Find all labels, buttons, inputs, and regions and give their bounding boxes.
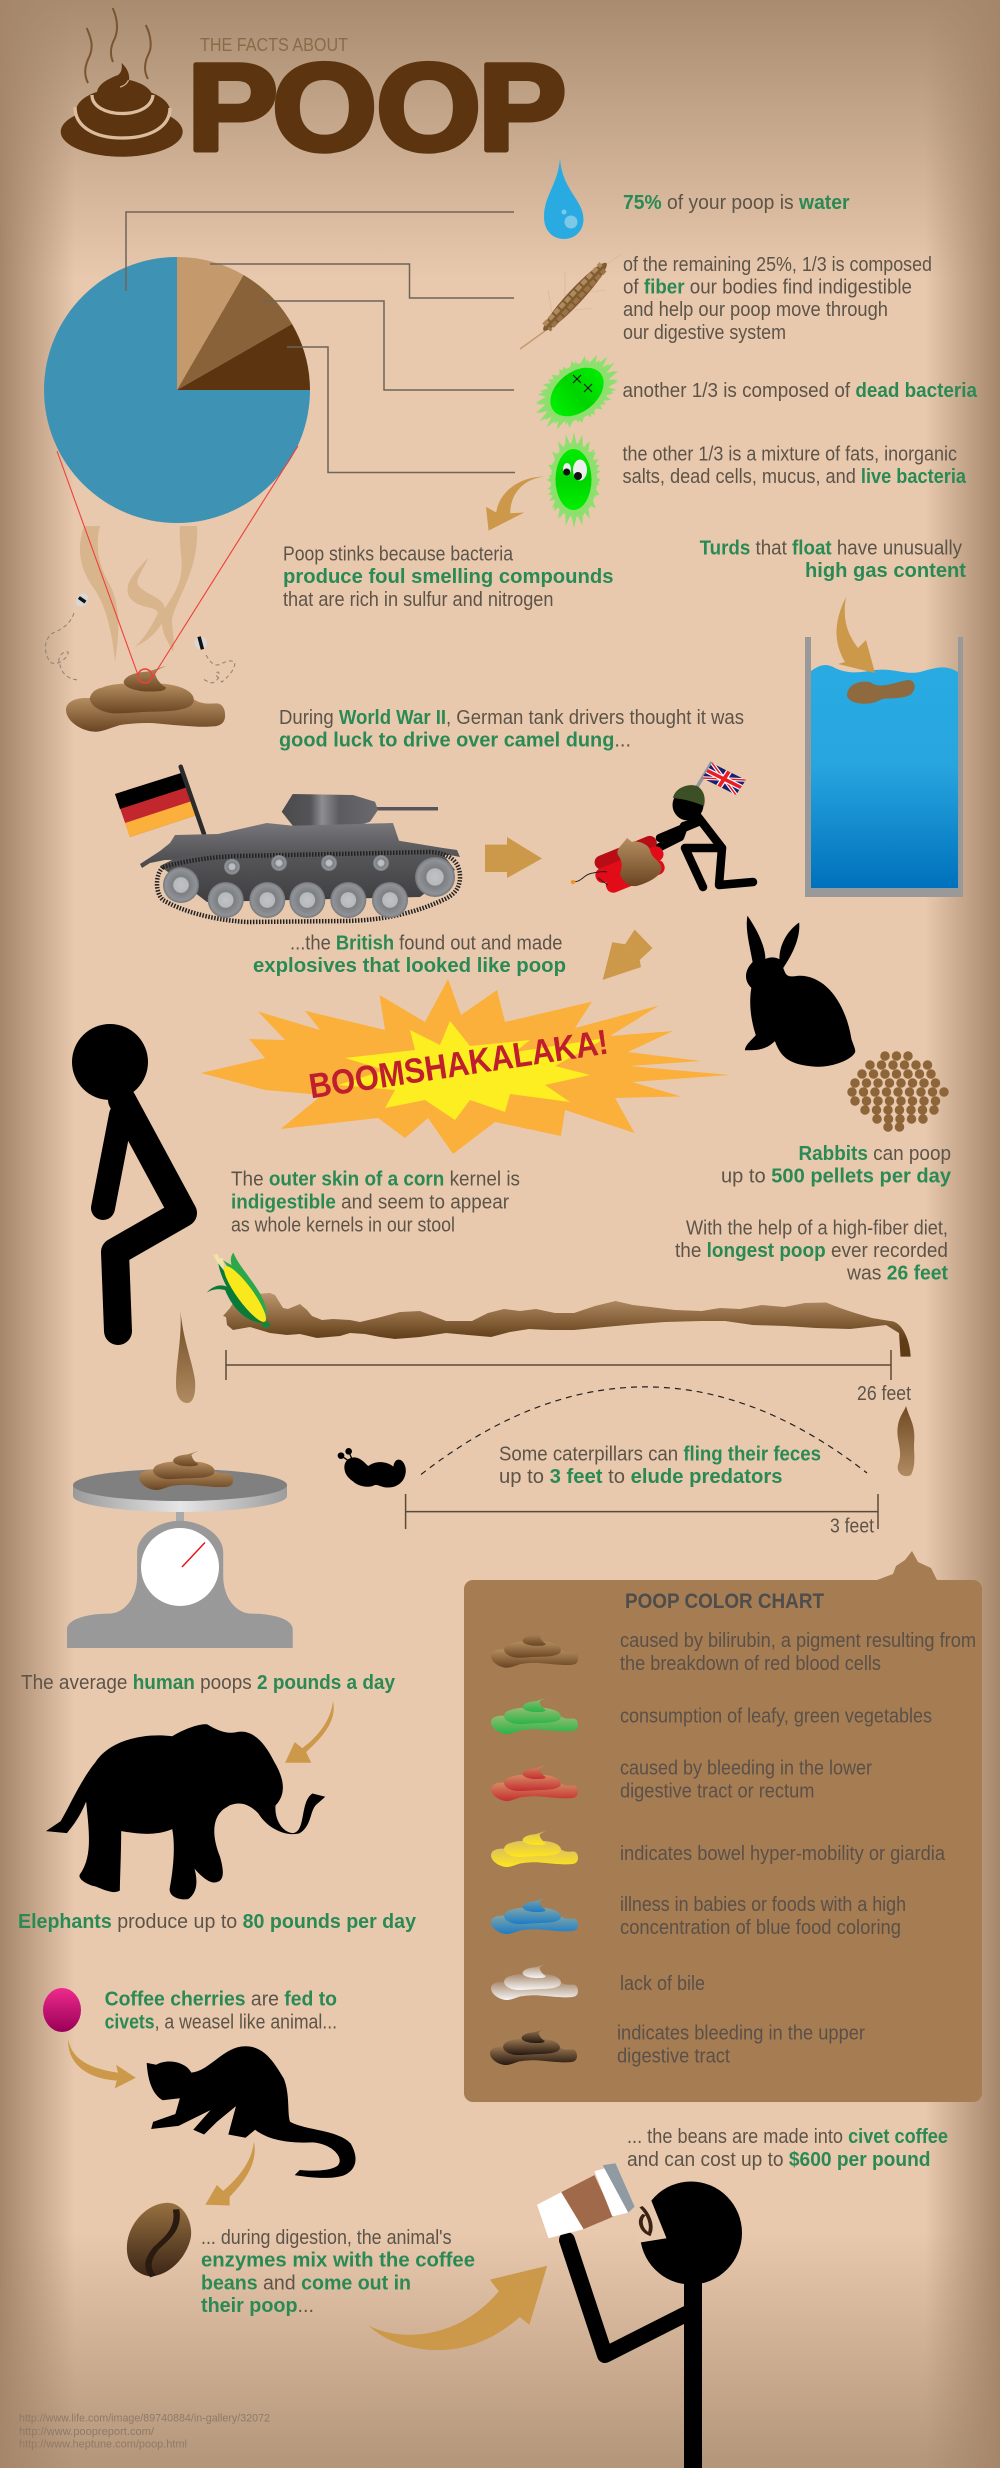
arrow: tank to soldier — [485, 837, 542, 878]
elephant silhouette — [46, 1724, 325, 1899]
text: live bacteria — [622, 444, 967, 488]
helmet — [673, 785, 705, 806]
text: caterpillars — [499, 1444, 821, 1488]
text: live bacteria: salts, dead cells, mucus, and live bacteria — [622, 466, 967, 488]
chart row: red: digestive tract or rectum — [620, 1780, 814, 1802]
civet silhouette — [147, 2046, 356, 2178]
soldier flag pole — [697, 762, 712, 787]
text: fiber: of fiber our bodies find indigestible — [623, 276, 912, 298]
title: poop — [187, 38, 567, 177]
text: longest poop: With the help of a high-fiber diet, — [686, 1218, 948, 1240]
floating poop — [847, 680, 915, 704]
text: caterpillars: up to 3 feet to elude predators — [499, 1466, 782, 1488]
text: elephants: Elephants produce up to 80 pounds per day — [18, 1911, 417, 1933]
rabbit silhouette — [745, 916, 855, 1067]
chart row: green — [491, 1698, 932, 1734]
panel: poop color chart — [464, 1551, 982, 2102]
text: fiber: of the remaining 25%, 1/3 is composed — [623, 254, 932, 276]
text: civet coffee — [627, 2126, 948, 2171]
chart row: yellow: indicates bowel hyper-mobility or giardia — [620, 1843, 946, 1865]
text: british: explosives that looked like poop — [253, 955, 566, 977]
label: 26 feet: 26 feet — [857, 1383, 911, 1405]
measure: 26 feet — [226, 1350, 891, 1380]
text: coffee cherries: Coffee cherries are fed to — [105, 1989, 337, 2011]
chart row: green: consumption of leafy, green vegetables — [620, 1705, 932, 1727]
icon: coffee cherry — [43, 1988, 81, 2032]
chart heading: POOP COLOR CHART — [625, 1590, 824, 1613]
poop disguise — [617, 838, 661, 886]
icon: corn — [207, 1253, 271, 1328]
soldier with dynamite — [571, 762, 753, 897]
text: fiber: and help our poop move through — [623, 299, 888, 321]
sources: http://www.heptune.com/poop.html — [19, 2438, 187, 2450]
text: turds float: Turds that float have unusually — [700, 537, 962, 559]
text: corn: as whole kernels in our stool — [231, 1214, 455, 1236]
text: longest poop: was 26 feet — [846, 1262, 948, 1284]
title: poop: O — [272, 39, 377, 177]
text: rabbits: Rabbits can poop — [798, 1143, 951, 1165]
text: rabbits — [721, 1143, 952, 1188]
chart row: brown: the breakdown of red blood cells — [620, 1653, 881, 1675]
icon: dead bacteria — [521, 340, 633, 444]
chart row: brown: caused by bilirubin, a pigment resulting from — [620, 1630, 976, 1652]
text: fiber — [623, 254, 932, 344]
text: world war II — [279, 707, 744, 752]
sources — [19, 2412, 270, 2450]
explosion text: BOOMSHAKALAKA! — [306, 1023, 611, 1106]
icon: live bacteria — [542, 432, 606, 528]
text: human: The average human poops 2 pounds a day — [21, 1672, 396, 1694]
tank — [140, 794, 460, 922]
icon: coffee bean — [127, 2203, 191, 2276]
poop on scale — [139, 1451, 233, 1490]
steam over poop — [80, 526, 197, 662]
text: world war II: good luck to drive over camel dung... — [279, 730, 631, 752]
icon: wheat — [520, 255, 620, 349]
title: poop: P — [187, 38, 278, 177]
pie chart — [44, 257, 310, 523]
measure: 3 feet — [406, 1494, 878, 1529]
arrow: cherry to civet — [68, 2039, 136, 2088]
text: digestion: beans and come out in — [201, 2272, 411, 2294]
text: turds float: high gas content — [805, 560, 966, 582]
glass of water with floating poop — [805, 637, 963, 897]
icon: poop logo with steam — [61, 8, 183, 157]
text: digestion: ... during digestion, the animal's — [201, 2227, 452, 2249]
connector lines — [126, 212, 515, 472]
caterpillar — [338, 1448, 406, 1488]
text: poop stinks: produce foul smelling compounds — [283, 566, 614, 588]
chart row: blue: illness in babies or foods with a high — [620, 1894, 906, 1916]
arrow: civet to bean — [205, 2142, 255, 2205]
text: corn — [231, 1168, 520, 1236]
chart row: yellow — [491, 1831, 946, 1867]
chart row: red — [491, 1758, 872, 1802]
big arrow: to coffee drinker — [369, 2266, 547, 2350]
chart row: dark — [490, 2023, 865, 2067]
arrow: soldier to explosion — [603, 930, 652, 980]
text: dead bacteria: another 1/3 is composed of dead bacteria — [622, 380, 978, 402]
text: coffee cherries — [105, 1989, 337, 2034]
chart row: white: lack of bile — [620, 1973, 705, 1995]
poop drop under figure — [176, 1311, 195, 1403]
flag: union jack — [702, 763, 746, 795]
sources: http://www.poopreport.com/ — [19, 2426, 155, 2438]
text: turds float — [700, 537, 966, 582]
chart row: blue — [491, 1894, 906, 1939]
icon: big poop — [66, 666, 225, 732]
chart row: white — [491, 1964, 705, 2000]
text: water: 75% of your poop is water — [623, 192, 850, 214]
tank lower hull — [160, 850, 455, 902]
text: longest poop: the longest poop ever recorded — [675, 1240, 948, 1262]
sources: http://www.life.com/image/89740884/in-gallery/32072 — [19, 2412, 270, 2424]
fuse — [573, 872, 608, 885]
tank wheels — [163, 855, 455, 918]
text: poop stinks — [283, 544, 614, 611]
icon: water drop — [544, 158, 584, 239]
arrow: into water — [836, 597, 875, 673]
text: british: ...the British found out and made — [290, 932, 562, 954]
soldier body — [658, 813, 753, 887]
text: digestion: their poop... — [201, 2295, 314, 2317]
text: civet coffee: ... the beans are made into civet coffee — [627, 2126, 948, 2148]
text: digestion — [201, 2227, 475, 2317]
sitting stick figure — [72, 1024, 183, 1331]
tank barrel — [376, 807, 438, 810]
text: coffee cherries: civets, a weasel like animal... — [105, 2012, 337, 2034]
chart row: brown — [491, 1630, 976, 1675]
text: poop stinks: Poop stinks because bacteria — [283, 544, 514, 566]
chart row: blue: concentration of blue food coloring — [620, 1917, 901, 1939]
chart row: red: caused by bleeding in the lower — [620, 1758, 872, 1780]
text: british — [253, 932, 566, 977]
dynamite — [589, 833, 670, 897]
rabbit pellets — [852, 1056, 952, 1127]
scale — [67, 1451, 293, 1648]
title — [187, 35, 567, 177]
text: longest poop — [675, 1218, 948, 1284]
text: digestion: enzymes mix with the coffee — [201, 2250, 475, 2272]
tank upper hull — [140, 823, 460, 868]
title: the facts about: THE FACTS ABOUT — [200, 35, 348, 55]
tank turret — [282, 794, 378, 826]
text: civet coffee: and can cost up to $600 per pound — [627, 2149, 930, 2171]
arrow: bacteria to smell — [486, 476, 545, 531]
red zoom lines — [57, 446, 298, 683]
text: fiber: our digestive system — [623, 322, 786, 344]
arrow: to elephant — [285, 1701, 334, 1763]
chart row: dark: digestive tract — [617, 2045, 730, 2067]
title: poop: P — [478, 39, 567, 177]
text: corn: indigestible and seem to appear — [231, 1191, 509, 1213]
title: poop: O — [376, 39, 481, 177]
text: live bacteria: the other 1/3 is a mixture of fats, inorganic — [622, 444, 957, 466]
text: world war II: During World War II, German tank drivers thought it was — [279, 707, 744, 729]
long poop — [223, 1293, 911, 1357]
chart row: dark: indicates bleeding in the upper — [617, 2023, 865, 2045]
coffee cup — [537, 2163, 635, 2238]
tank track — [157, 852, 460, 922]
explosion — [201, 979, 730, 1154]
label: 3 feet: 3 feet — [830, 1516, 874, 1538]
text: poop stinks: that are rich in sulfur and nitrogen — [283, 589, 554, 611]
text: corn: The outer skin of a corn kernel is — [231, 1168, 520, 1190]
text: caterpillars: Some caterpillars can fling their feces — [499, 1444, 821, 1466]
text: rabbits: up to 500 pellets per day — [721, 1166, 952, 1188]
dashed arc — [421, 1387, 867, 1474]
poop drop at end — [897, 1406, 914, 1476]
soldier head — [672, 790, 704, 820]
coffee drinker stick figure — [567, 2182, 742, 2468]
flag: germany — [115, 767, 204, 837]
icon: flies with dashed paths — [45, 591, 235, 683]
